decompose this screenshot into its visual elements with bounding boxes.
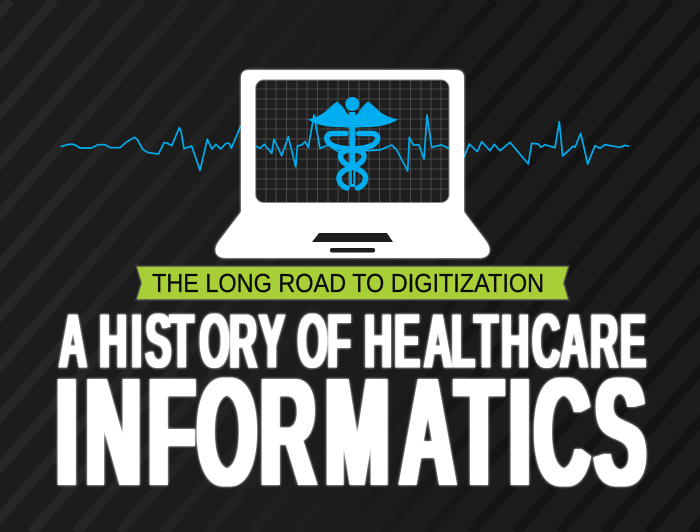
touchpad button [330,248,375,252]
ribbon shape [136,266,569,300]
ECG line: on screen [256,115,449,171]
title line 2: INFORMATICS [56,346,646,518]
ECG line: right of laptop [464,122,629,164]
screen grid [256,80,449,202]
title line 1: A HISTORY OF HEALTHCARE [59,298,646,384]
laptop body [215,70,490,258]
laptop screen [256,80,449,202]
ECG line: left of laptop [61,126,241,170]
caduceus wings [308,102,398,128]
laptop [215,70,490,258]
icon: caduceus [308,97,398,188]
ribbon banner [136,266,569,300]
caduceus snakes [327,134,378,188]
touchpad [312,233,393,242]
subtitle: THE LONG ROAD TO DIGITIZATION [152,270,544,298]
caduceus staff [349,112,355,187]
caduceus orb [345,97,359,111]
